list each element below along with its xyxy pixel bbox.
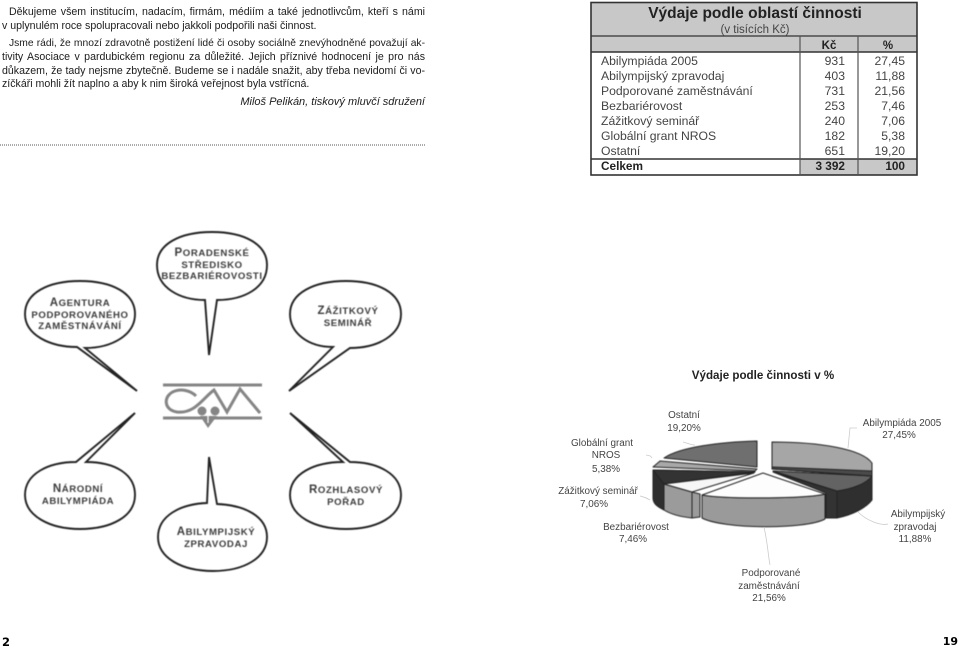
text block: thanks: zíčkáři mohli žít naplno a aby k nim široká veřejnost byla vstřícná.: [2, 78, 309, 90]
text block: thanks: Děkujeme všem institucím, nadacím, firmám, médiím a také jednotlivcům, kteří s námi: [9, 6, 425, 18]
table rows: Bezbariérovost: [601, 99, 683, 113]
label: Podporované zaměstnávání: Podporované: [742, 568, 801, 579]
bubble: agentura podporovaného zaměstnávání: AGENTURA: [50, 297, 110, 309]
label: Ostatní: Ostatní: [668, 410, 700, 421]
table rows: 931: [825, 54, 845, 68]
bubble: abilympijský zpravodaj: ZPRAVODAJ: [184, 539, 248, 550]
pie slice: Abilympijský zpravodaj: [773, 472, 837, 518]
pie slice: Ostatní: [664, 441, 757, 467]
table rows: 403: [825, 69, 845, 83]
label: Abilympijský zpravodaj: 11,88%: [899, 534, 932, 545]
table subtitle: (v tisících Kč): [720, 24, 790, 36]
bubble: abilympijský zpravodaj: ABILYMPIJSKÝ: [177, 526, 255, 538]
table rows: 240: [825, 114, 845, 128]
icon: CAA logo: [163, 385, 262, 428]
chart title: Výdaje podle činnosti v %: [692, 369, 834, 382]
bubble: národní abilympiáda: NÁRODNÍ: [53, 483, 103, 495]
label: Abilympiáda 2005: 27,45%: [882, 430, 916, 441]
table header: %: [883, 40, 893, 52]
label: Podporované zaměstnávání: 21,56%: [752, 593, 786, 604]
text block: thanks: Jsme rádi, že mnozí zdravotně postižení lidé či osoby sociálně znevýhodněné považují ak-: [9, 38, 425, 49]
table rows: [601, 54, 905, 158]
text block: thanks: v uplynulém roce spolupracovali nebo jakkoli podpořili naši činnost.: [2, 20, 316, 32]
table rows: 27,45: [874, 54, 905, 68]
label: Abilympiáda 2005: Abilympiáda 2005: [863, 418, 942, 429]
pie slice: Podporované zaměstnávání: [702, 494, 825, 527]
table rows: 7,06: [881, 114, 905, 128]
bubble: poradenské středisko: STŘEDISKO: [181, 259, 243, 271]
pie slice: Abilympiáda 2005: [772, 442, 872, 476]
chart: 3D pie: [653, 441, 872, 527]
label: Zážitkový seminář: Zážitkový seminář: [558, 486, 638, 497]
table rows: 182: [825, 129, 845, 143]
pie slice: Zážitkový seminář: [653, 470, 755, 510]
table rows: Globální grant NROS: [601, 129, 716, 143]
bubble: poradenské středisko: PORADENSKÉ: [175, 247, 249, 259]
table rows: Podporované zaměstnávání: [601, 84, 753, 98]
table total row: 3 392: [815, 159, 845, 173]
label: Bezbariérovost: 7,46%: [619, 534, 647, 545]
bubble: národní abilympiáda: ABILYMPIÁDA: [42, 495, 114, 507]
table rows: 7,46: [881, 99, 905, 113]
bubble: agentura podporovaného zaměstnávání: ZAMĚSTNÁVÁNÍ: [38, 320, 122, 332]
table header: [822, 40, 893, 52]
table total row: Celkem: [601, 159, 643, 173]
pie slice: Globální grant NROS: [653, 461, 757, 471]
bubble: zážitkový seminář: [289, 281, 401, 391]
bubble: poradenské středisko: BEZBARIÉROVOSTI: [161, 270, 263, 282]
label: Podporované zaměstnávání: zaměstnávání: [738, 581, 800, 592]
diagram: speech bubbles around logo: [25, 232, 401, 571]
text block: thanks: Miloš Pelikán, tiskový mluvčí sdružení: [240, 96, 425, 108]
pie slice: Bezbariérovost: [664, 484, 700, 518]
label: Abilympijský zpravodaj: Abilympijský: [891, 509, 945, 520]
label: Abilympijský zpravodaj: zpravodaj: [894, 522, 936, 533]
bubble: poradenské středisko: [157, 232, 267, 355]
label: Globální grant NROS: 5,38%: [592, 464, 620, 475]
label: Ostatní: 19,20%: [667, 423, 701, 434]
table rows: 731: [825, 84, 845, 98]
bubble: zážitkový seminář: ZÁŽITKOVÝ: [318, 305, 378, 317]
table rows: Abilympijský zpravodaj: [601, 69, 724, 83]
table rows: 19,20: [874, 144, 905, 158]
label: Globální grant NROS: NROS: [592, 450, 621, 461]
bubble: zážitkový seminář: SEMINÁŘ: [324, 317, 372, 329]
table total row: [601, 159, 905, 173]
text block: thanks: [2, 6, 426, 108]
table rows: Zážitkový seminář: [601, 114, 700, 128]
table total row: 100: [885, 159, 905, 173]
table rows: Abilympiáda 2005: [601, 54, 698, 68]
table title: Výdaje podle oblastí činnosti: [648, 5, 862, 22]
table rows: 253: [825, 99, 845, 113]
label: Globální grant NROS: Globální grant: [571, 438, 633, 449]
text block: thanks: tivity Asociace v pardubickém regionu za důležité. Jejich příznivé hodnocení je pro nás: [2, 51, 425, 63]
chart labels: [558, 410, 945, 604]
table rows: 651: [825, 144, 845, 158]
bubble: národní abilympiáda: [25, 413, 135, 529]
bubble: rozhlasový pořad: POŘAD: [327, 496, 365, 508]
bubble: abilympijský zpravodaj: [158, 457, 267, 571]
bubble: rozhlasový pořad: [290, 413, 401, 529]
bubble: agentura podporovaného zaměstnávání: [25, 281, 137, 391]
chart leader lines: [640, 428, 888, 565]
table rows: 5,38: [881, 129, 905, 143]
label: Bezbariérovost: Bezbariérovost: [603, 522, 669, 533]
table rows: 21,56: [874, 84, 905, 98]
table rows: 11,88: [875, 69, 905, 83]
table: expenses by area: [591, 2, 917, 175]
bubble: rozhlasový pořad: ROZHLASOVÝ: [309, 484, 383, 496]
text block: thanks: důkazem, že tady nejsme zbytečně. Budeme se i nadále snažit, aby třeba nevidomí či vo-: [2, 65, 425, 77]
bubble: agentura podporovaného zaměstnávání: PODPOROVANÉHO: [31, 309, 129, 321]
table header: Kč: [822, 40, 837, 52]
table rows: Ostatní: [601, 144, 641, 158]
label: Zážitkový seminář: 7,06%: [580, 499, 608, 510]
